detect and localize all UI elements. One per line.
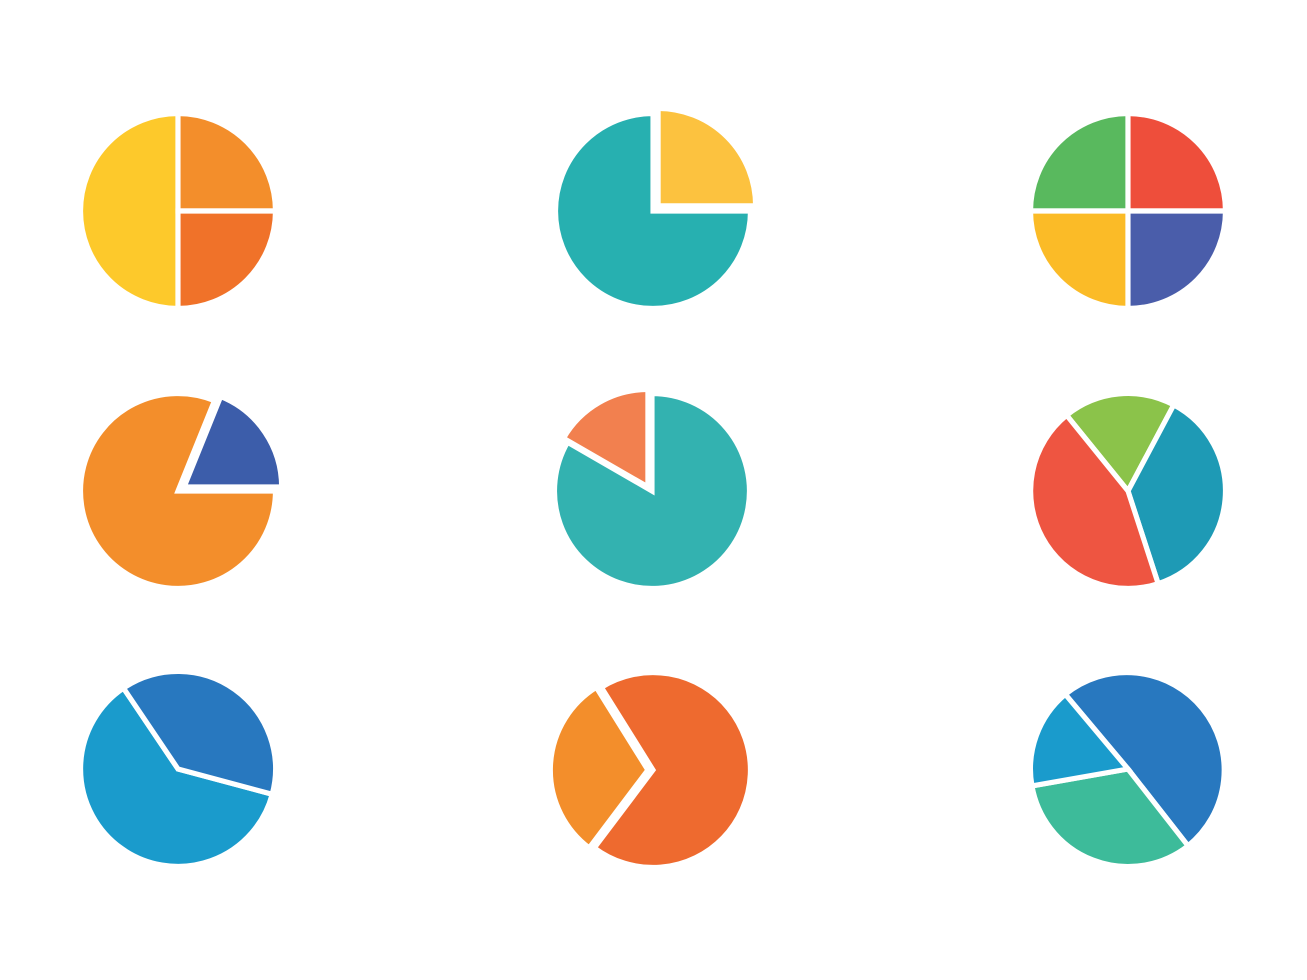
pie chart 3: four quarters	[1031, 114, 1225, 308]
pie chart 1: half and two quarters	[81, 114, 275, 308]
pie chart 5: teal with coral slice	[555, 389, 749, 588]
pie chart 4: orange with blue slice	[81, 394, 282, 588]
pie chart 8: red-orange with orange slice	[550, 673, 750, 867]
pie chart 6: three slices	[1031, 394, 1225, 588]
pie chart 9: three slices blue/green	[1030, 673, 1224, 867]
pie chart 2: three quarters with exploded quarter	[556, 108, 756, 308]
pie chart 7: two blues	[81, 671, 276, 866]
